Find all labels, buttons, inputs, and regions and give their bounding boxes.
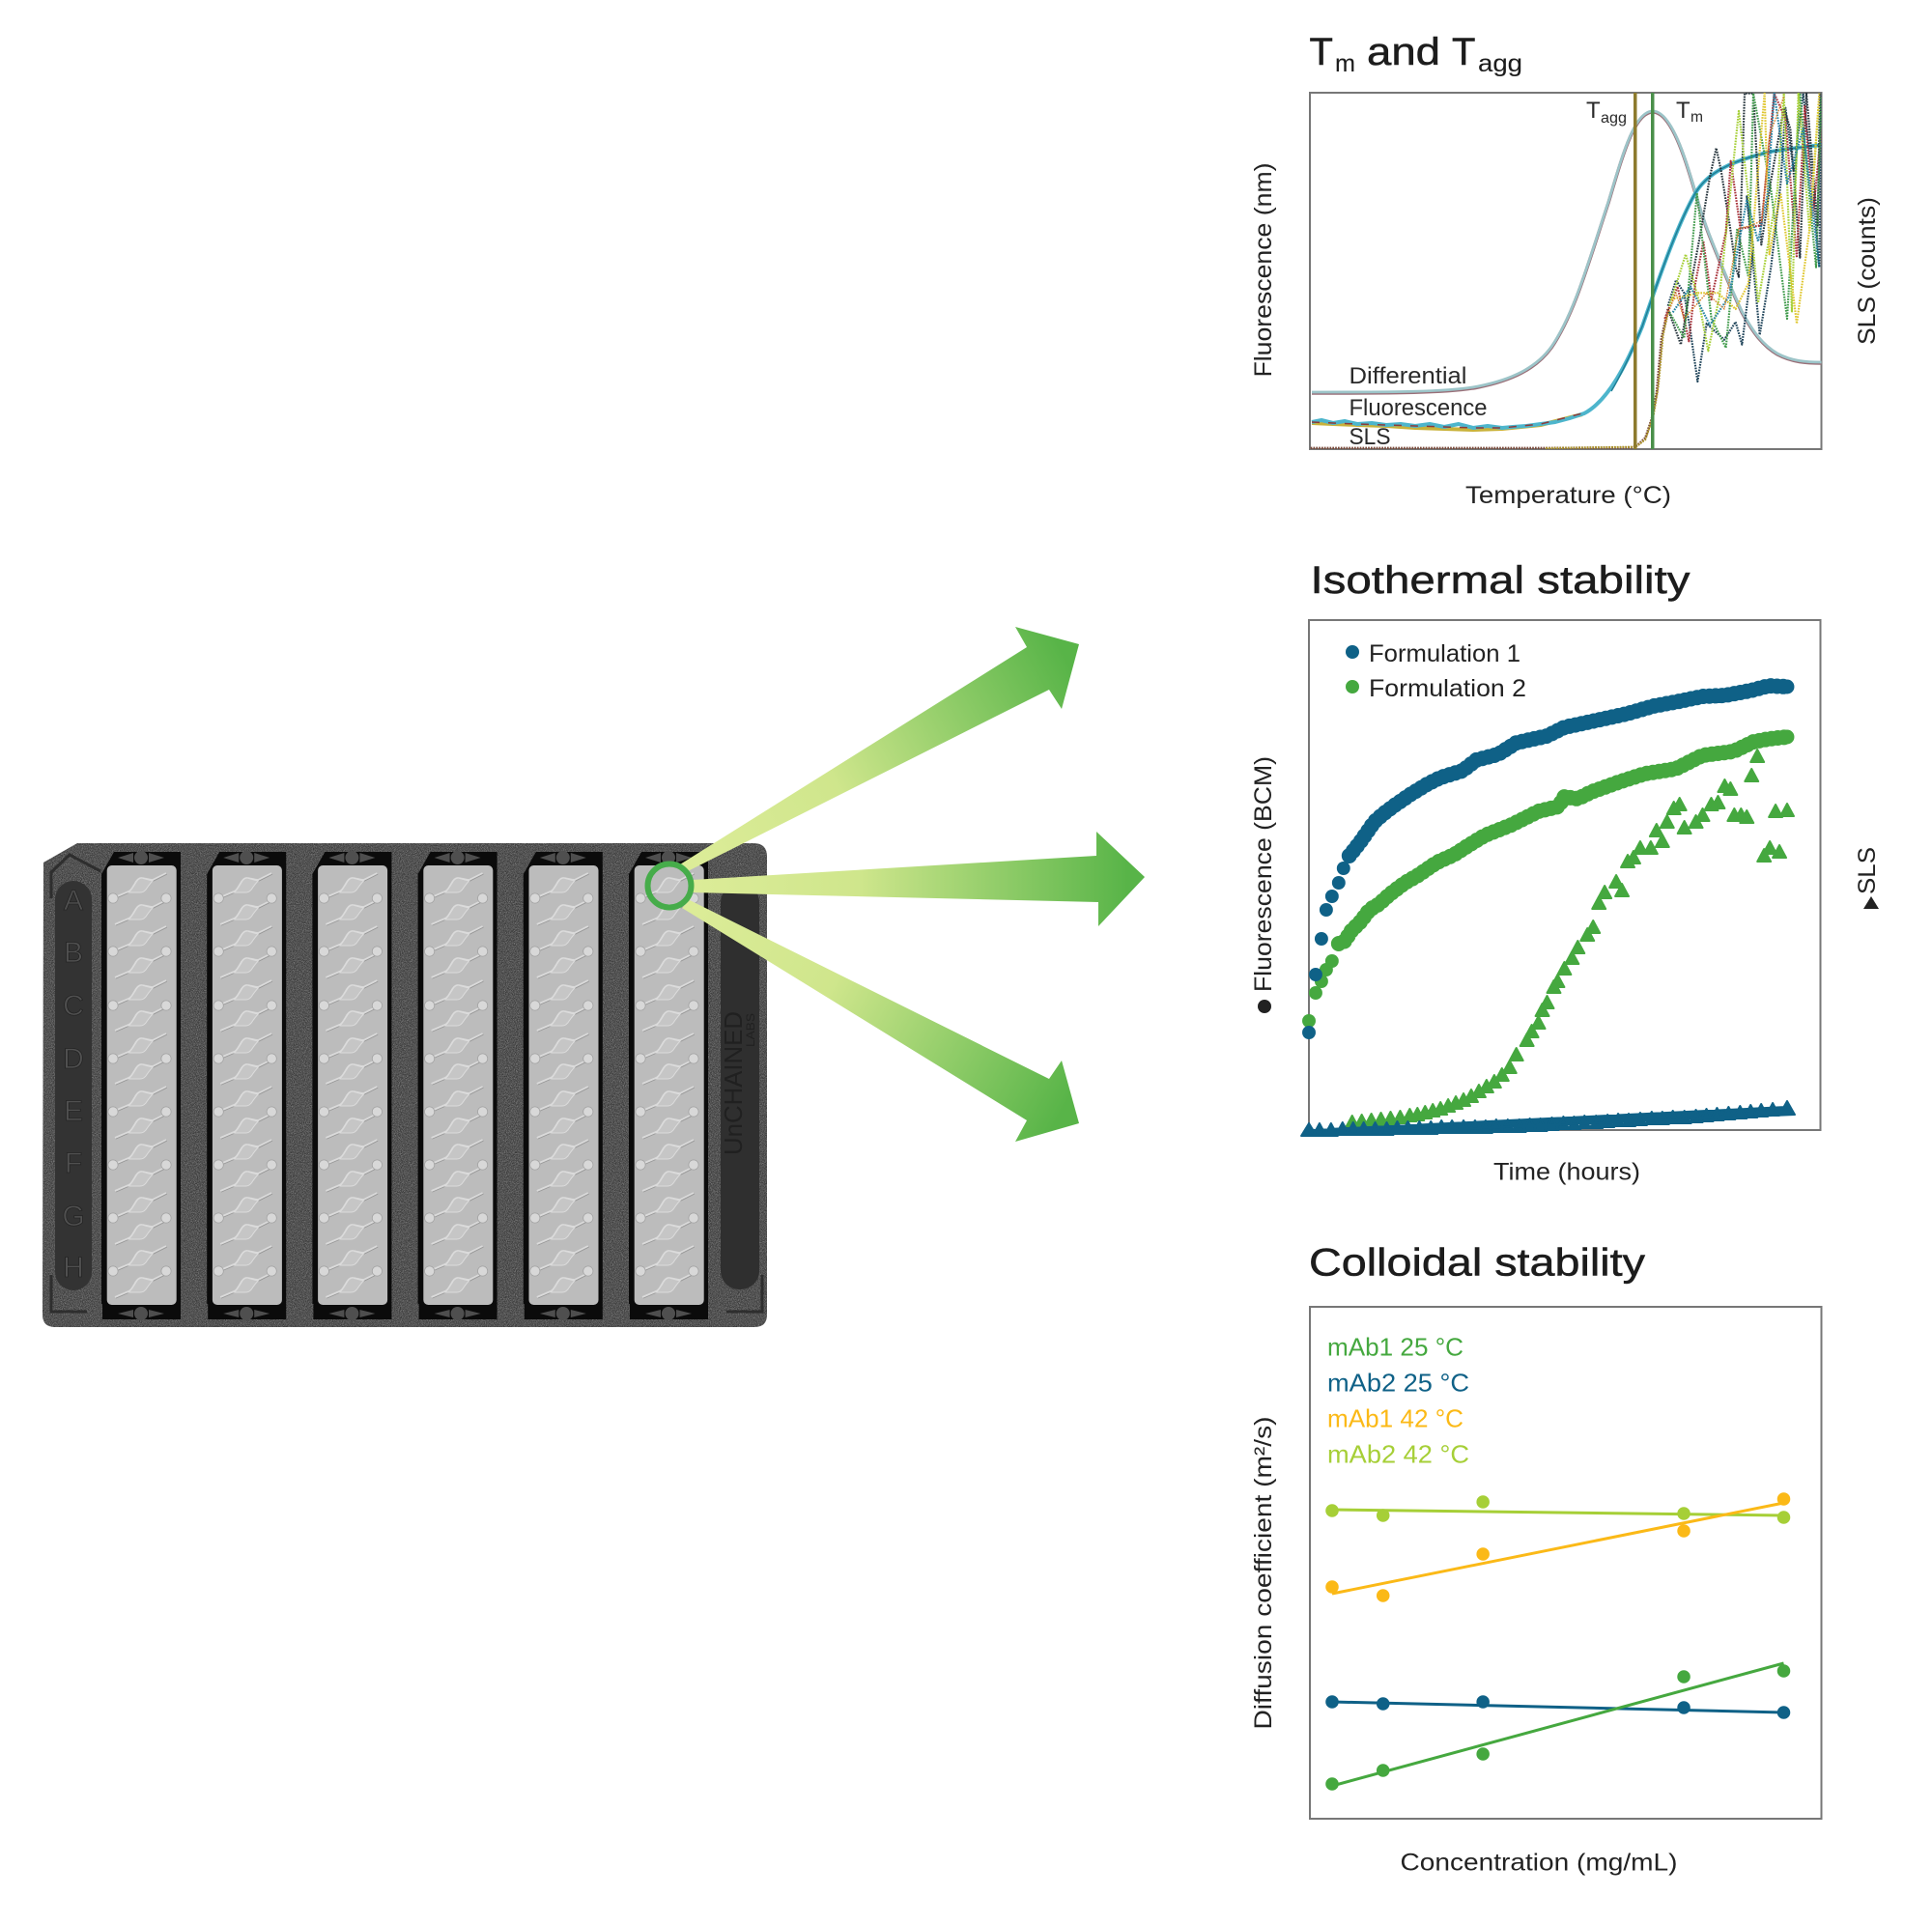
SLS triangles: formulation 1 bbox=[1301, 1101, 1795, 1136]
row label bar: D bbox=[63, 1043, 84, 1075]
legend: Formulation 1 bbox=[1369, 640, 1520, 667]
label: Tagg: T bbox=[1586, 98, 1601, 124]
row label bar: C bbox=[63, 990, 84, 1022]
row label bar: A bbox=[64, 885, 83, 917]
x axis label: Time: Time (hours) bbox=[1493, 1159, 1640, 1186]
legend: mAb2 25 °C bbox=[1327, 1368, 1469, 1397]
row label bar: G bbox=[62, 1201, 85, 1232]
arrow: top bbox=[680, 627, 1079, 872]
plot frame bbox=[1310, 93, 1822, 449]
right logo bar: UnCHAINED bbox=[719, 1011, 748, 1155]
y axis label: SLS (counts): SLS (counts) bbox=[1854, 197, 1881, 345]
strip 4 bbox=[418, 851, 497, 1320]
curves bbox=[1311, 94, 1822, 448]
series: mAb1 25 °C bbox=[1325, 1663, 1790, 1791]
row label bar: B bbox=[64, 937, 83, 969]
heading: Tm and Tagg: and bbox=[1367, 31, 1440, 73]
series: mAb1 42 °C bbox=[1325, 1492, 1790, 1602]
label: SLS: SLS bbox=[1349, 424, 1391, 450]
fluorescence dots: formulation 2 bbox=[1302, 730, 1794, 1028]
Tagg marker line bbox=[1634, 93, 1636, 449]
SLS triangles: formulation 2 bbox=[1346, 750, 1794, 1128]
plot frame bbox=[1309, 620, 1820, 1130]
arrow: bottom bbox=[682, 900, 1079, 1142]
series: mAb2 42 °C bbox=[1325, 1495, 1790, 1524]
legend: Formulation 2 bbox=[1369, 675, 1526, 702]
panel: Isothermal stability chart bbox=[1250, 559, 1881, 1186]
Tm marker line bbox=[1651, 93, 1654, 449]
strip 1 bbox=[101, 851, 181, 1320]
x axis label: Concentration: Concentration (mg/mL) bbox=[1401, 1849, 1677, 1876]
heading: Tm and Tagg: agg bbox=[1478, 50, 1522, 77]
x axis label: Temperature: Temperature (°C) bbox=[1465, 482, 1671, 509]
legend: mAb1 25 °C bbox=[1327, 1333, 1463, 1362]
legend: mAb1 42 °C bbox=[1327, 1404, 1463, 1433]
plot frame bbox=[1310, 1307, 1822, 1819]
row label bar: F bbox=[65, 1147, 82, 1179]
heading: Tm and Tagg: m bbox=[1335, 50, 1355, 77]
y axis label: Diffusion coefficient: Diffusion coefficient (m²/s) bbox=[1250, 1416, 1277, 1729]
y axis label: SLS: SLS bbox=[1854, 847, 1881, 894]
heading: Tm and Tagg: T bbox=[1310, 31, 1333, 73]
heading: Tm and Tagg: T bbox=[1452, 31, 1475, 73]
SLS dotted traces bbox=[1311, 94, 1822, 448]
panel: Tm and Tagg chart bbox=[1250, 31, 1881, 509]
fluorescence dots: formulation 1 bbox=[1302, 680, 1794, 1039]
strip 2 bbox=[207, 851, 286, 1320]
label: Tm: T bbox=[1676, 98, 1690, 124]
right logo bar: LABS bbox=[744, 1013, 757, 1047]
label: Fluorescence: Fluorescence bbox=[1349, 395, 1488, 421]
heading: Colloidal stability: Colloidal stability bbox=[1309, 1242, 1645, 1285]
row label bar: H bbox=[63, 1252, 84, 1284]
row label bar: E bbox=[64, 1095, 83, 1127]
legend bbox=[1346, 640, 1526, 702]
data series bbox=[1301, 680, 1795, 1136]
strip 6 bbox=[629, 851, 708, 1320]
right logo bar bbox=[719, 884, 759, 1289]
label: Tm: m bbox=[1690, 109, 1703, 126]
series: mAb2 25 °C bbox=[1325, 1695, 1790, 1719]
strip 5 bbox=[524, 851, 603, 1320]
legend bbox=[1327, 1333, 1469, 1468]
plate body bbox=[43, 843, 767, 1327]
arrow: middle bbox=[692, 832, 1145, 926]
y axis label: Fluorescence (BCM): Fluorescence (BCM) bbox=[1250, 756, 1277, 992]
data series bbox=[1325, 1492, 1790, 1791]
panel: Colloidal stability chart bbox=[1250, 1242, 1822, 1876]
legend: mAb2 42 °C bbox=[1327, 1439, 1469, 1468]
label: Tagg: agg bbox=[1601, 110, 1627, 127]
panel: microplate bbox=[43, 843, 767, 1327]
strip 3 bbox=[312, 851, 391, 1320]
heading: Isothermal stability: Isothermal stability bbox=[1310, 559, 1690, 602]
highlight circle on well bbox=[647, 863, 692, 908]
y axis label: Fluorescence (nm): Fluorescence (nm) bbox=[1250, 162, 1277, 377]
label: Differential: Differential bbox=[1349, 363, 1466, 389]
row label bar bbox=[55, 881, 92, 1290]
